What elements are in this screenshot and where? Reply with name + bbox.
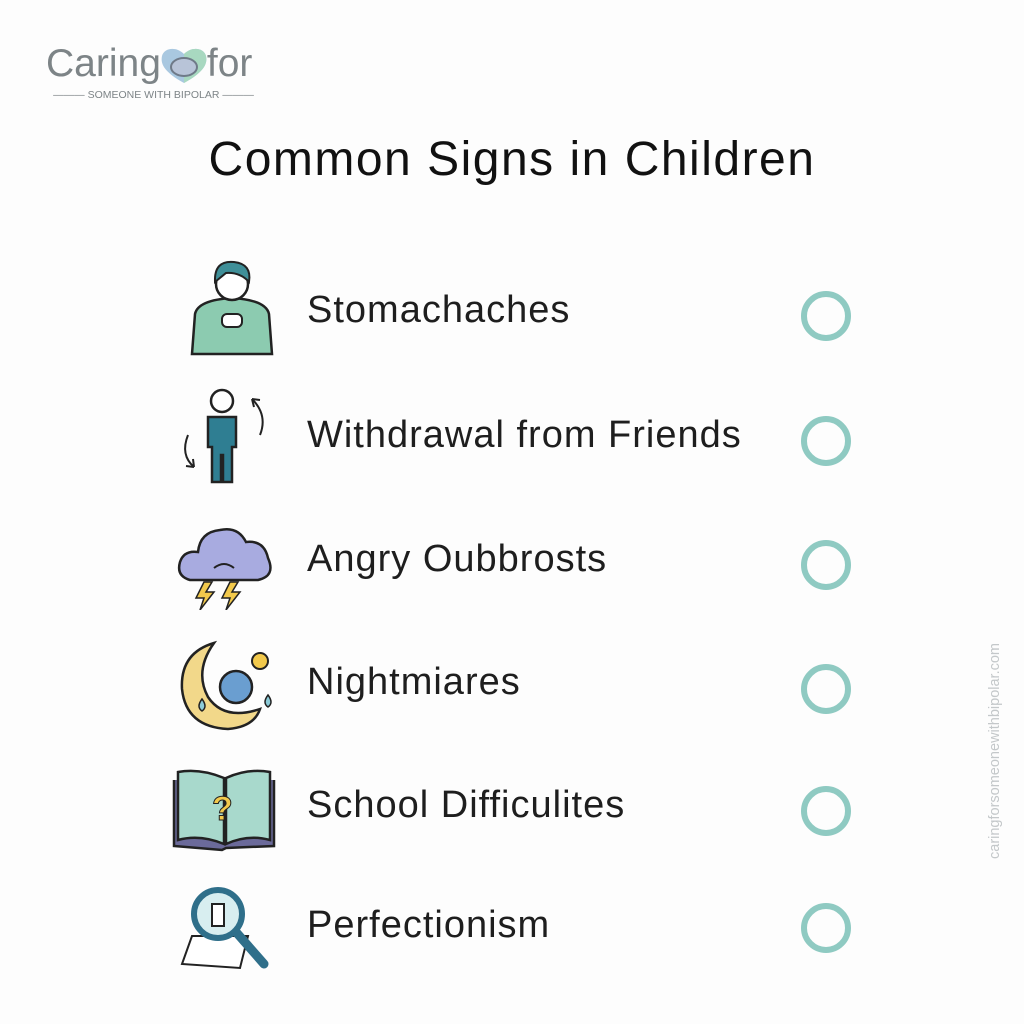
- title: Common Signs in Children: [209, 133, 815, 186]
- row: withdrawal: [184, 388, 851, 484]
- row: angry outbursts: [178, 528, 851, 610]
- icon: person with arrows: [184, 388, 264, 484]
- logo: [46, 42, 254, 101]
- row: perfectionism: [180, 887, 851, 969]
- icon: heart brain: [162, 48, 206, 83]
- vertical website text: caringforsomeonewithbipolar.com: [987, 643, 1003, 859]
- icon: magnifier over paper: [180, 887, 268, 969]
- row: stomachaches: [190, 260, 851, 356]
- row: school difficulties: [172, 770, 851, 852]
- label: Angry Oubbrosts: [307, 538, 607, 580]
- icon: boy: [190, 260, 274, 356]
- icon: book: ?: [212, 790, 233, 828]
- icon: storm cloud: [178, 528, 272, 610]
- logo text: Caring for: [46, 42, 252, 85]
- checkbox circle: [801, 664, 851, 714]
- checkbox circle: [801, 540, 851, 590]
- checkbox circle: [801, 291, 851, 341]
- label: School Difficulites: [307, 784, 625, 826]
- label: Stomachaches: [307, 289, 570, 331]
- label: Nightmiares: [307, 661, 521, 703]
- icon: moon and sad face: [180, 640, 272, 730]
- checkbox circle: [801, 416, 851, 466]
- row: nightmares: [180, 640, 851, 730]
- label: Perfectionism: [307, 904, 550, 946]
- checkbox circle: [801, 786, 851, 836]
- label: Withdrawal from Friends: [307, 414, 742, 456]
- checkbox circle: [801, 903, 851, 953]
- logo tagline: ——— SOMEONE WITH BIPOLAR ———: [53, 89, 254, 101]
- icon: book: [172, 770, 276, 852]
